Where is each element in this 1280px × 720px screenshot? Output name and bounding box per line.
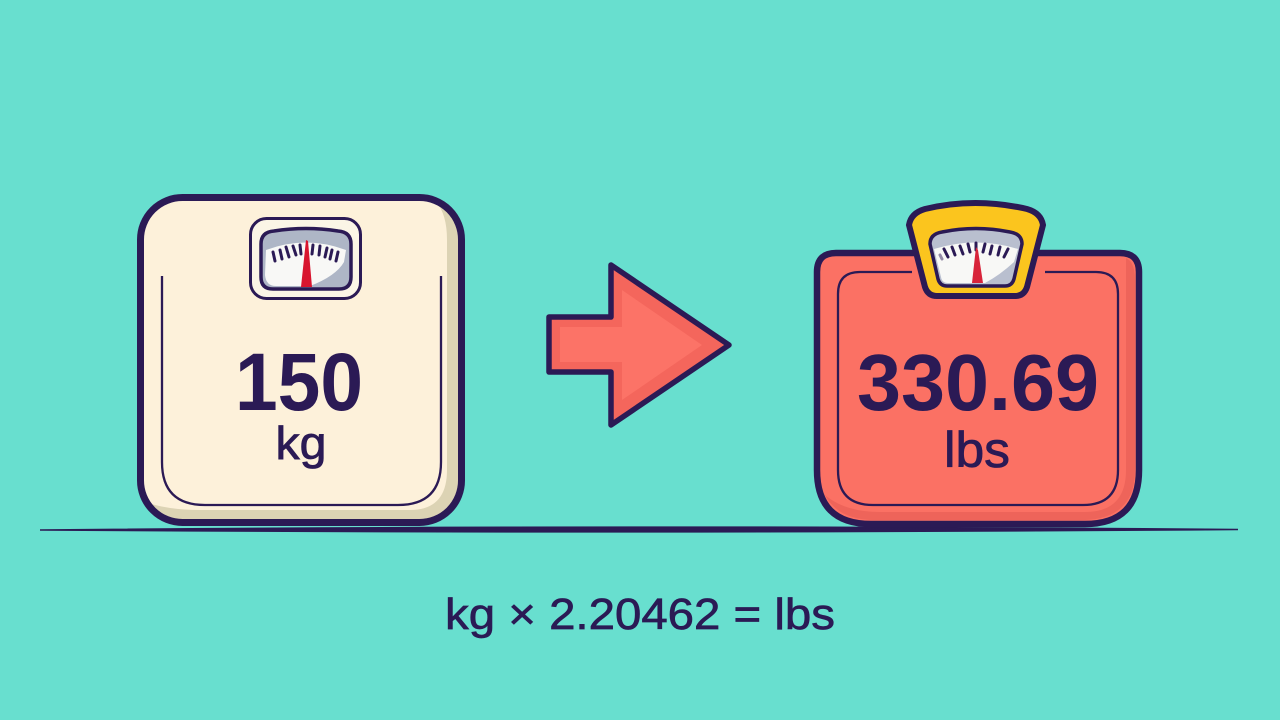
dial: right scale with yellow housing xyxy=(909,203,1043,296)
conversion formula: kg × 2.20462 = lbs xyxy=(445,590,835,639)
unit: lbs: lbs xyxy=(944,422,1010,478)
scale: 150 kg xyxy=(140,198,462,522)
unit: kg: kg xyxy=(276,417,326,469)
dial: left scale xyxy=(250,218,360,298)
scale: 330.69 lbs xyxy=(817,203,1139,524)
arrow xyxy=(549,265,729,425)
value: 150: 150 xyxy=(235,337,363,428)
ground line xyxy=(40,527,1238,532)
scale body xyxy=(817,253,1139,524)
scale body xyxy=(140,198,462,522)
value: 330.69: 330.69 xyxy=(857,338,1099,427)
